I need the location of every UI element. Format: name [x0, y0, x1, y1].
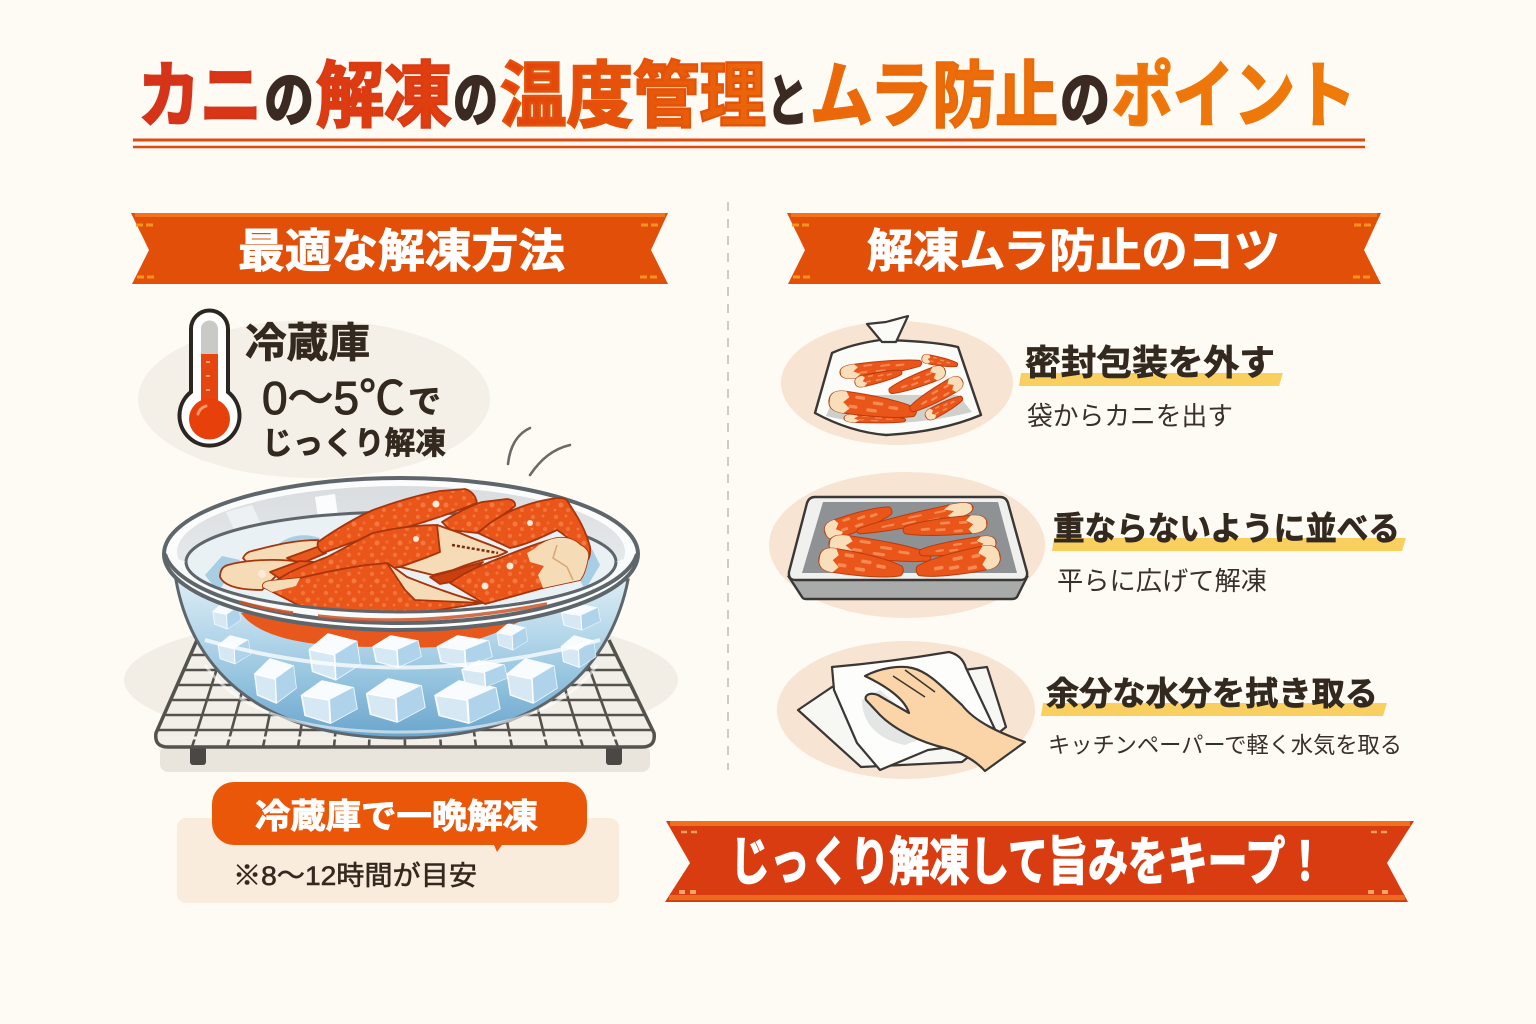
description: キッチンペーパーで軽く水気を取る [1048, 733, 1402, 758]
crab legs [220, 489, 590, 616]
ribbon heading: optimal thawing method: 最適な解凍方法 [238, 225, 565, 277]
crab seen through water [241, 610, 540, 648]
ice cubes [213, 603, 600, 723]
title: ポイント [1112, 57, 1356, 137]
bowl interior and rim [164, 478, 638, 630]
title: カニ [138, 57, 262, 137]
underline [1041, 703, 1387, 716]
underline [1019, 373, 1283, 386]
pill: thaw overnight in fridge: 冷蔵庫で一晩解凍 [255, 798, 538, 836]
icon: crab in bag [815, 316, 981, 435]
icon: crab on tray [789, 497, 1027, 599]
icon: cold air lines [508, 428, 570, 475]
heading: 密封包装を外す [1025, 344, 1275, 383]
title: 温度管理 [500, 57, 766, 137]
icon: thermometer [180, 311, 240, 446]
title: ムラ防止 [810, 57, 1058, 137]
text: de: で [408, 383, 441, 420]
glass bowl with water [176, 580, 628, 738]
bowl front rim [165, 554, 637, 623]
illustration: crab in ice bowl on rack [124, 478, 678, 772]
title [133, 57, 1365, 147]
pill: thaw overnight in fridge [212, 782, 587, 852]
underline [1052, 538, 1406, 551]
callout: fridge temperature [138, 311, 490, 478]
ribbon heading: optimal thawing method [131, 213, 668, 284]
ribbon heading: tips for preventing uneven thawing: 解凍ムラ防止のコツ [867, 225, 1280, 277]
title: と [767, 70, 808, 133]
tip 1: remove sealed packaging [781, 316, 1283, 445]
icon: hand with paper towel [798, 652, 1025, 771]
title: の [453, 67, 498, 134]
title: の [1060, 67, 1110, 134]
title: の [264, 67, 314, 134]
note box: 8 to 12 hours: ※8～12時間が目安 [233, 861, 477, 891]
description: 袋からカニを出す [1027, 401, 1233, 431]
description: 平らに広げて解凍 [1057, 566, 1267, 596]
text: slowly thaw: じっくり解凍 [262, 426, 446, 461]
wire rack [156, 640, 654, 765]
text: 0 to 5 degrees: 0～5℃ [262, 372, 405, 424]
tip 3: wipe off excess water [777, 641, 1402, 779]
text: fridge: 冷蔵庫 [245, 320, 370, 366]
tip 2: spread without overlapping [769, 472, 1406, 618]
note box: 8 to 12 hours [177, 818, 619, 903]
bottom ribbon: keep the flavor [665, 821, 1414, 902]
bottom ribbon: keep the flavor: じっくり解凍して旨みをキープ！ [730, 834, 1325, 892]
heading: 重ならないように並べる [1053, 510, 1400, 547]
title: 解凍 [316, 57, 452, 137]
heading: 余分な水分を拭き取る [1046, 675, 1378, 712]
ribbon heading: tips for preventing uneven thawing [787, 213, 1381, 284]
